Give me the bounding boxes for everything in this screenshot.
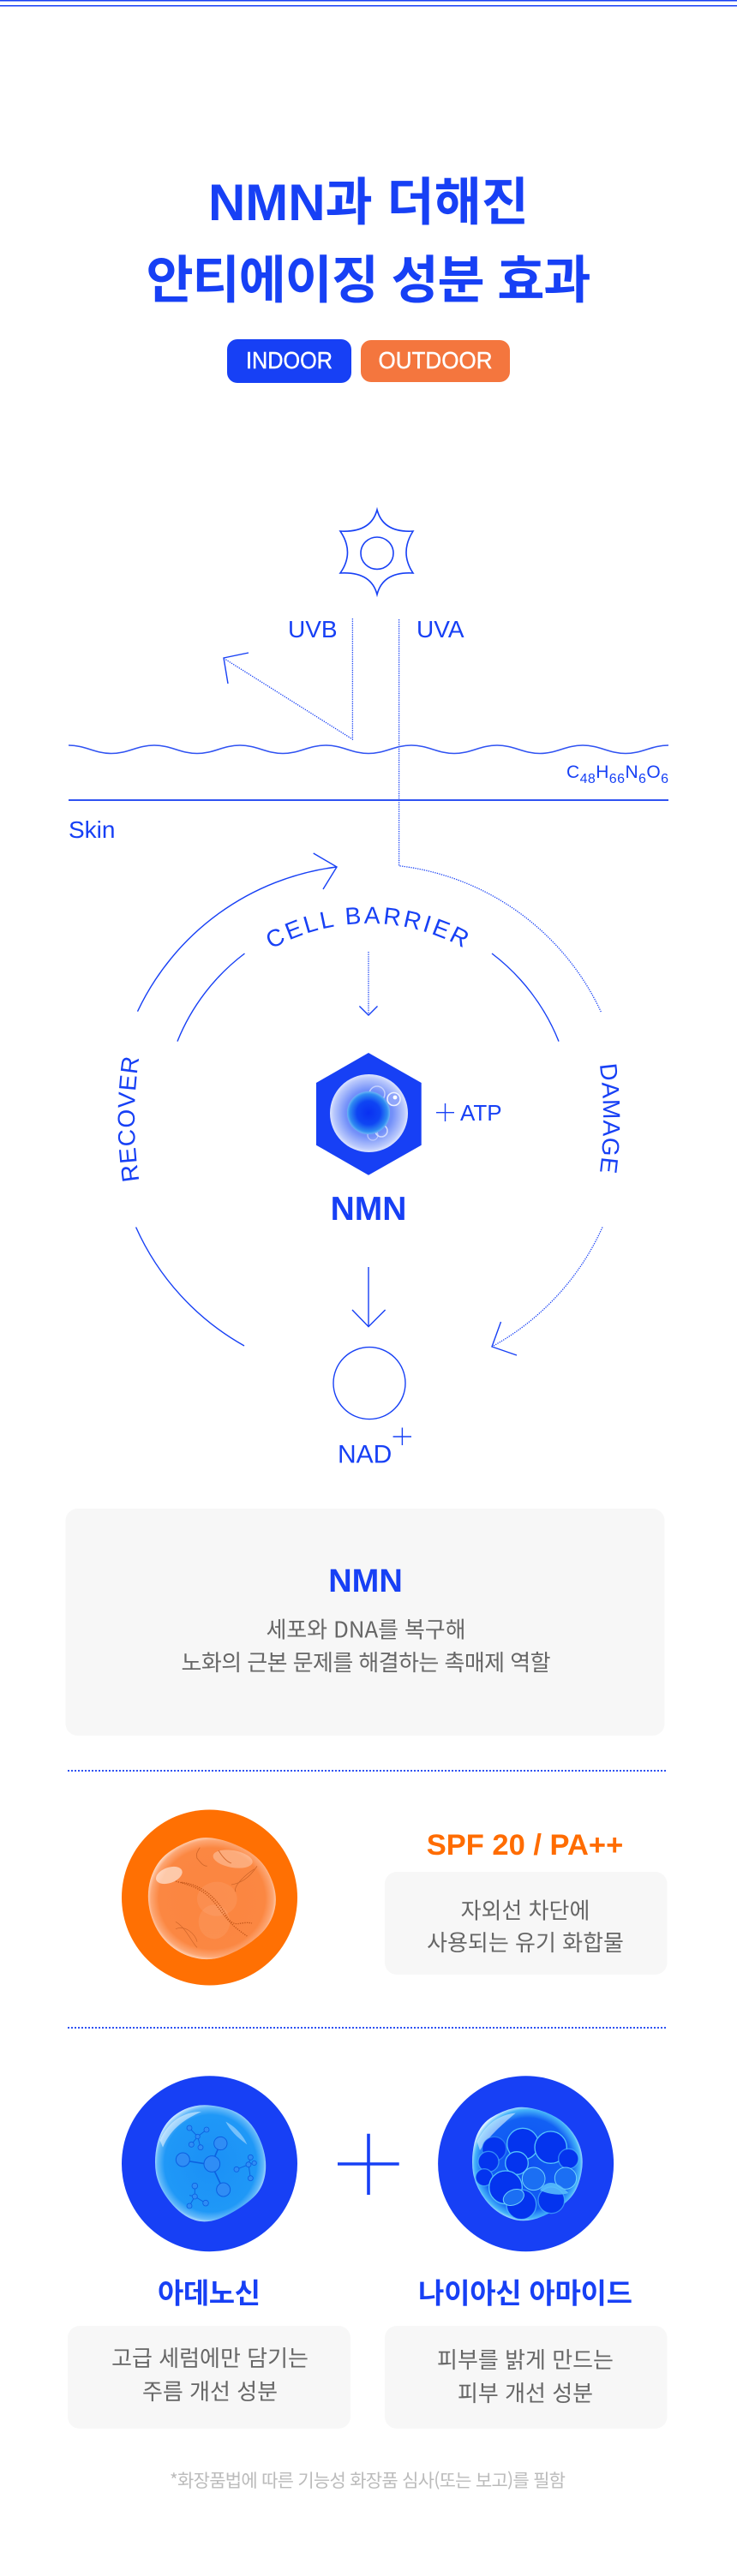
arrow: UVB reflected xyxy=(224,619,352,739)
skin line xyxy=(69,799,668,801)
icon: niacinamide droplet xyxy=(438,2076,614,2251)
icon: sun xyxy=(340,510,413,595)
label: DAMAGE: DAMAGE xyxy=(600,1064,620,1173)
arrow: barrier to NMN xyxy=(359,952,377,1015)
arrow: recover outer arc xyxy=(137,853,337,1012)
label: NMN: NMN xyxy=(331,1191,406,1228)
heading: niacinamide: 나이아신 아마이드 xyxy=(418,2270,632,2311)
arrow: UVA penetrating and damage arc xyxy=(399,619,602,1013)
panel: niacinamide description: 피부 개선 성분 xyxy=(458,2376,593,2408)
label: RECOVER: RECOVER xyxy=(117,1057,139,1181)
chemical formula: C xyxy=(566,762,579,782)
footnote: *화장품법에 따른 기능성 화장품 심사(또는 보고)를 필함 xyxy=(170,2467,566,2493)
panel: NMN xyxy=(65,1509,665,1736)
recover lower arc xyxy=(136,1227,244,1346)
label: UVA: UVA xyxy=(416,616,464,643)
panel: niacinamide description xyxy=(385,2326,667,2429)
chemical formula: N xyxy=(625,762,638,782)
title: NMN과 더해진 xyxy=(208,161,529,236)
pill: outdoor: OUTDOOR xyxy=(379,347,492,374)
icon: adenosine droplet xyxy=(122,2076,297,2251)
divider xyxy=(68,2027,668,2029)
panel: SPF description: 사용되는 유기 화합물 xyxy=(427,1926,624,1957)
heading: SPF: SPF 20 / PA++ xyxy=(427,1829,623,1862)
panel: SPF description xyxy=(385,1872,667,1975)
cell barrier arcs xyxy=(177,953,559,1042)
label: plus ATP xyxy=(436,1100,502,1126)
panel: adenosine description xyxy=(68,2326,351,2429)
panel: adenosine description: 고급 세럼에만 담기는 xyxy=(111,2341,309,2373)
chemical formula: H xyxy=(596,762,608,782)
pill: indoor: INDOOR xyxy=(246,347,333,374)
top double rule xyxy=(0,0,737,7)
text: NMN description: 세포와 DNA를 복구해 xyxy=(266,1612,466,1645)
icon: NMN hexagon cell xyxy=(316,1053,422,1175)
panel: SPF description: 자외선 차단에 xyxy=(461,1893,590,1926)
legend pills xyxy=(227,339,510,383)
heading: NMN: NMN xyxy=(328,1563,403,1599)
divider xyxy=(68,1770,668,1772)
label: UVB: UVB xyxy=(288,616,338,643)
label: CELL BARRIER: CELL BARRIER xyxy=(267,906,468,947)
panel: niacinamide description: 피부를 밝게 만드는 xyxy=(437,2343,614,2375)
label: plus ATP: ATP xyxy=(460,1100,502,1126)
plus sign xyxy=(338,2134,399,2195)
title: 안티에이징 성분 효과 xyxy=(146,239,591,314)
text: NMN description: 노화의 근본 문제를 해결하는 촉매제 역할 xyxy=(182,1646,551,1677)
skin surface wave xyxy=(69,745,668,754)
label: NAD plus xyxy=(338,1427,411,1468)
text: NMN description xyxy=(182,1612,551,1677)
label: Skin: Skin xyxy=(69,816,115,843)
heading: adenosine: 아데노신 xyxy=(158,2270,261,2311)
chemical formula: 48 xyxy=(580,772,596,786)
chemical formula: 66 xyxy=(609,772,625,786)
label: NAD plus: NAD xyxy=(338,1441,392,1468)
chemical formula: 6 xyxy=(661,772,668,786)
title xyxy=(146,161,591,314)
icon: orange DNA droplet xyxy=(122,1809,297,1986)
NAD circle xyxy=(333,1348,405,1419)
panel: adenosine description: 주름 개선 성분 xyxy=(142,2375,278,2406)
arrow: NMN to NAD xyxy=(352,1267,386,1327)
chemical formula: O xyxy=(646,762,661,782)
chemical formula: 6 xyxy=(638,772,646,786)
arrow: damage lower arc xyxy=(492,1227,602,1355)
pill: outdoor xyxy=(361,340,510,382)
pill: indoor xyxy=(227,339,351,383)
